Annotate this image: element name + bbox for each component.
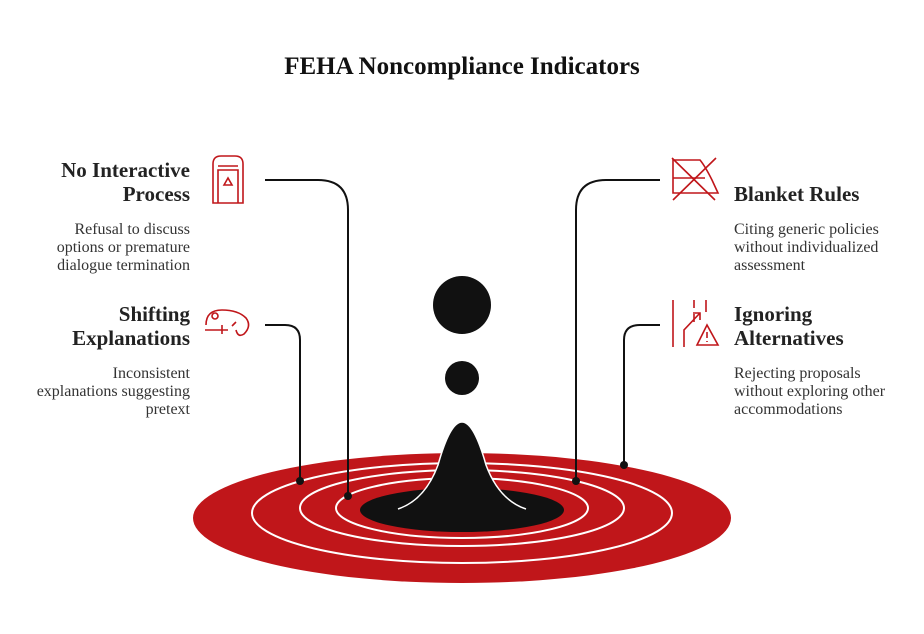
text: Blanket Rules: without individualized: [734, 239, 878, 256]
text: No Interactive Process: [57, 221, 190, 274]
text: Ignoring Alternatives: accommodations: [734, 401, 842, 418]
heading: Blanket Rules: Blanket Rules: [734, 182, 859, 206]
icon: door: [213, 156, 243, 203]
drop large: [433, 276, 491, 334]
text: Blanket Rules: assessment: [734, 257, 805, 274]
drop small: [445, 361, 479, 395]
connector lines: [265, 180, 660, 496]
text: Ignoring Alternatives: without exploring other: [734, 383, 885, 400]
text: No Interactive Process: dialogue termination: [57, 257, 190, 274]
title: FEHA Noncompliance Indicators: [284, 53, 640, 80]
ripple base: [193, 453, 731, 583]
text: Shifting Explanations: pretext: [146, 401, 190, 418]
text: Shifting Explanations: explanations suggesting: [37, 383, 190, 400]
heading: Ignoring Alternatives: [734, 302, 844, 350]
text: Shifting Explanations: [37, 365, 190, 418]
text: Blanket Rules: Citing generic policies: [734, 221, 879, 238]
heading: Ignoring Alternatives: Ignoring: [734, 302, 812, 326]
heading: No Interactive Process: Process: [123, 182, 190, 206]
text: Ignoring Alternatives: Rejecting proposals: [734, 365, 861, 382]
splash peak: [398, 422, 526, 512]
text: No Interactive Process: options or premature: [57, 239, 190, 256]
heading: No Interactive Process: [61, 158, 190, 206]
heading: Ignoring Alternatives: Alternatives: [734, 326, 844, 350]
text: Shifting Explanations: Inconsistent: [113, 365, 190, 382]
text: No Interactive Process: Refusal to discuss: [74, 221, 190, 238]
heading: No Interactive Process: No Interactive: [61, 158, 190, 182]
heading: Shifting Explanations: [72, 302, 190, 350]
heading: Shifting Explanations: Shifting: [119, 302, 190, 326]
icon: path with warning: [673, 300, 718, 347]
icon: crossed rule: [672, 158, 718, 200]
heading: Shifting Explanations: Explanations: [72, 326, 190, 350]
text: Ignoring Alternatives: [734, 365, 885, 418]
text: Blanket Rules: [734, 221, 879, 274]
icon: chameleon: [205, 310, 249, 335]
